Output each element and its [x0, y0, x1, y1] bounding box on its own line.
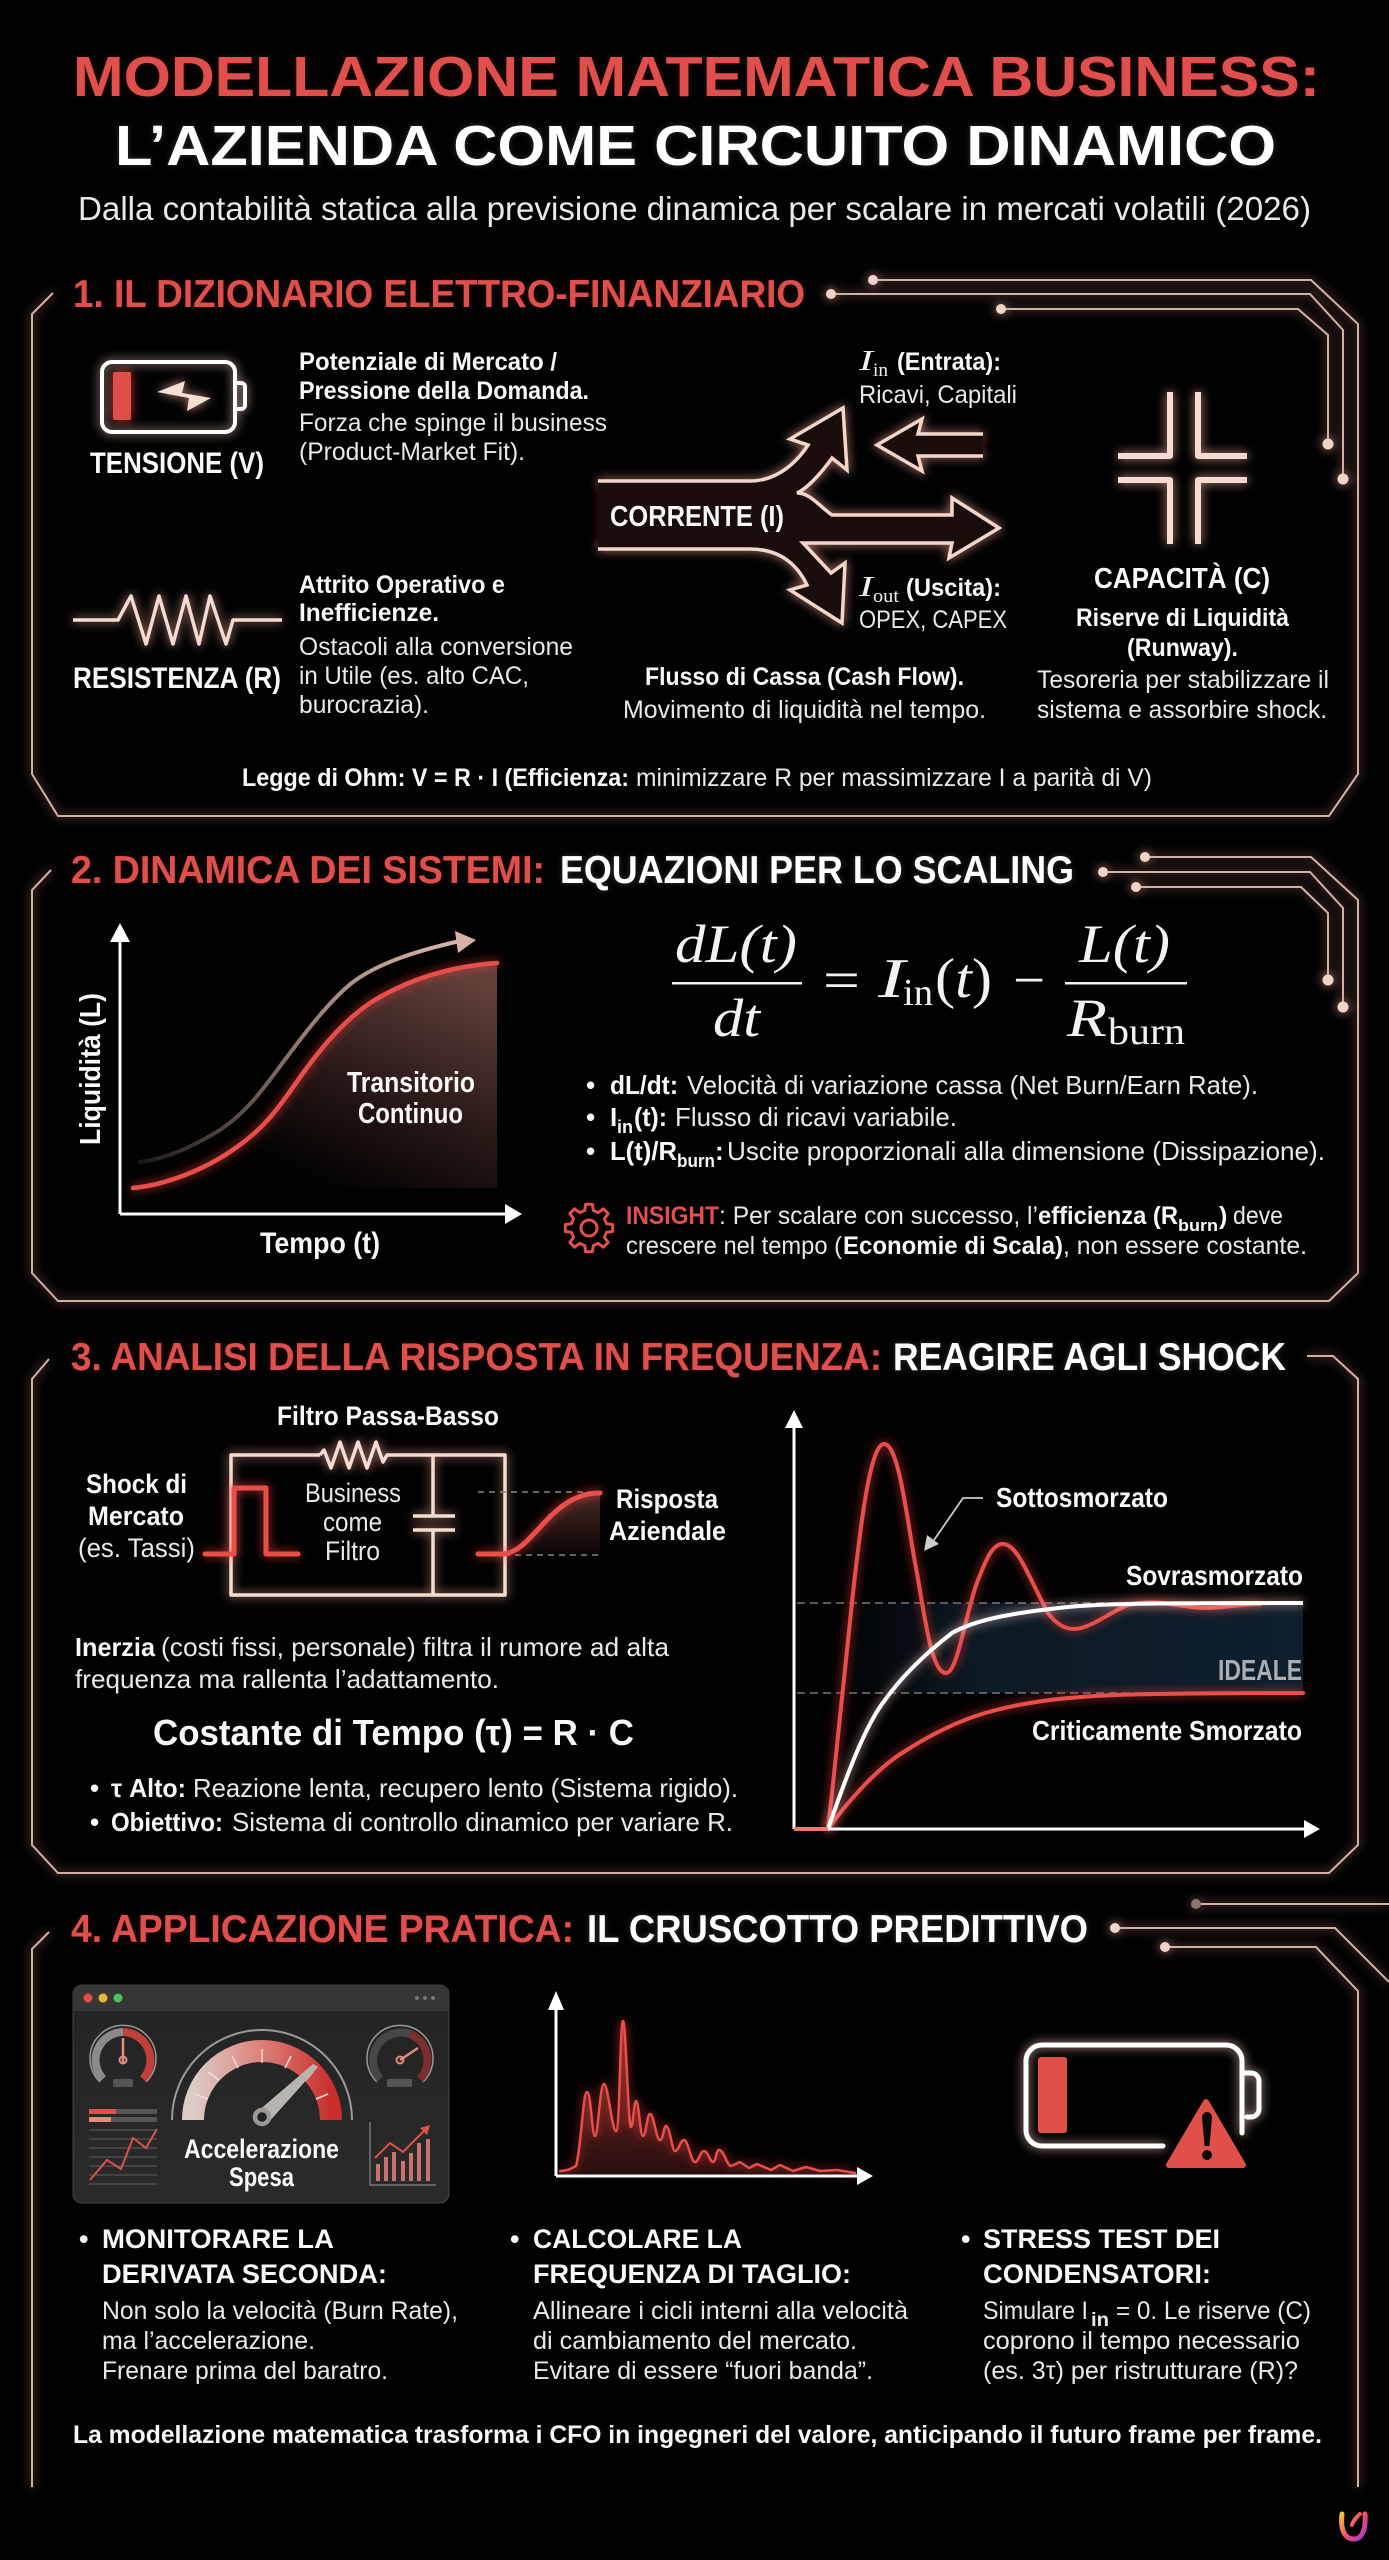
insight callout: deve — [1233, 1202, 1283, 1230]
column: stress test: coprono il tempo necessario — [983, 2327, 1300, 2355]
area under curve — [133, 963, 497, 1188]
label business come filtro: Filtro — [325, 1536, 380, 1566]
insight callout: efficienza (R — [1038, 1202, 1178, 1230]
subtitle: Dalla contabilità statica alla previsione dinamica per scalare in mercati volatili (2026) — [78, 190, 1311, 227]
icon: corner logo — [1342, 2514, 1365, 2539]
text: inerzia: Inerzia — [75, 1632, 156, 1662]
icon: battery low — [102, 362, 245, 432]
dashed guides — [797, 1603, 1303, 1693]
underdamped curve — [828, 1444, 1260, 1829]
column: stress test: Simulare I — [983, 2297, 1088, 2325]
bullets tau: τ Alto: — [111, 1773, 186, 1803]
column: stress test: STRESS TEST DEI — [983, 2224, 1220, 2254]
shock pulse — [205, 1488, 298, 1554]
text: flusso di cassa: Flusso di Cassa (Cash Flow). — [645, 663, 964, 691]
panel frame with circuit traces — [32, 852, 1358, 1301]
chart: frequency spectrum — [548, 1991, 873, 2185]
bullet list: L(t)/R — [610, 1136, 677, 1166]
dashboard mockup — [73, 1985, 449, 2203]
label I in — [857, 346, 1017, 409]
chart: damping response — [785, 1410, 1320, 1838]
axis label y: Liquidità (L) — [75, 993, 107, 1145]
panel: 2 dinamica dei sistemi — [32, 849, 1358, 1301]
bullet list: • — [586, 1136, 595, 1166]
panel: 1 dizionario elettro-finanziario — [32, 273, 1358, 816]
critically damped curve — [828, 1693, 1303, 1829]
text: capacita: sistema e assorbire shock. — [1037, 696, 1327, 724]
arrow: corrente splitting — [598, 408, 999, 623]
bullet list: Uscite proporzionali alla dimensione (Dissipazione). — [727, 1136, 1325, 1166]
text: potenziale di mercato: Forza che spinge il business — [299, 409, 607, 437]
bullets tau: Sistema di controllo dinamico per variare R. — [232, 1807, 733, 1837]
heading 4: 4. APPLICAZIONE PRATICA: — [71, 1908, 574, 1951]
formula costante di tempo: Costante di Tempo (τ) = R · C — [153, 1712, 634, 1753]
heading 4: IL CRUSCOTTO PREDITTIVO — [587, 1908, 1088, 1951]
text: attrito operativo: in Utile (es. alto CAC, — [299, 662, 529, 690]
equation: dt — [713, 988, 762, 1048]
panel: 3 risposta in frequenza — [32, 1336, 1358, 1873]
column: frequenza di taglio: di cambiamento del mercato. — [533, 2327, 857, 2355]
bullet list: Velocità di variazione cassa (Net Burn/Earn Rate). — [687, 1070, 1258, 1100]
heading 3: 3. ANALISI DELLA RISPOSTA IN FREQUENZA: — [71, 1336, 882, 1379]
column: stress test: • — [961, 2224, 970, 2254]
bullet list: dL/dt: — [610, 1070, 678, 1100]
label I in: Ricavi, Capitali — [859, 381, 1017, 409]
column: frequenza di taglio: Evitare di essere “fuori banda”. — [533, 2357, 873, 2385]
label business come filtro: come — [323, 1507, 382, 1537]
column: derivata seconda: Non solo la velocità (Burn Rate), — [102, 2297, 458, 2325]
panel: 4 applicazione pratica — [32, 1899, 1389, 2487]
bullet list: (t): — [634, 1102, 667, 1132]
label criticamente smorzato: Criticamente Smorzato — [1032, 1715, 1302, 1746]
closing statement: La modellazione matematica trasforma i CFO in ingegneri del valore, anticipando il futuro frame per frame. — [73, 2421, 1322, 2449]
insight callout: Economie di Scala) — [843, 1232, 1063, 1260]
column: derivata seconda: Frenare prima del baratro. — [102, 2357, 388, 2385]
insight callout: crescere nel tempo ( — [626, 1232, 843, 1260]
text: flusso di cassa: Movimento di liquidità nel tempo. — [623, 696, 986, 724]
equation: in — [903, 972, 933, 1014]
insight callout — [626, 1202, 1307, 1260]
column: stress test: (es. 3τ) per ristrutturare (R)? — [983, 2357, 1298, 2385]
legge di ohm: minimizzare R per massimizzare I a parità di V) — [636, 764, 1152, 792]
label resistenza: RESISTENZA (R) — [73, 662, 281, 695]
icon: gear — [565, 1204, 613, 1252]
insight callout: ) — [1219, 1202, 1227, 1230]
ghost trend arrow — [140, 931, 476, 1162]
bullet list: burn — [677, 1151, 715, 1171]
label shock — [78, 1469, 195, 1563]
equation: L(t) — [1078, 914, 1170, 974]
gauge label: Accelerazione — [184, 2134, 339, 2164]
label risposta — [609, 1484, 726, 1546]
label I out: I — [857, 572, 876, 603]
text: capacita: CAPACITÀ (C) — [1094, 561, 1270, 595]
label business come filtro: Business — [305, 1478, 401, 1508]
insight callout: burn — [1178, 1216, 1218, 1235]
bullets tau: Obiettivo: — [111, 1807, 223, 1837]
text: capacita — [1037, 561, 1329, 724]
circuit diagram — [205, 1442, 601, 1595]
bullet list: Flusso di ricavi variabile. — [675, 1102, 957, 1132]
ideal band — [835, 1603, 1303, 1693]
icon: empty battery with warning — [1026, 2045, 1259, 2165]
main gauge — [172, 2030, 352, 2124]
mini bars and sparkline — [89, 2109, 157, 2184]
chart label: Transitorio — [347, 1067, 475, 1099]
text: attrito operativo: Attrito Operativo e — [299, 571, 505, 599]
text: capacita: Tesoreria per stabilizzare il — [1037, 666, 1329, 694]
label business come filtro — [305, 1478, 401, 1566]
heading 2: 2. DINAMICA DEI SISTEMI: — [71, 849, 545, 892]
axes — [785, 1410, 1320, 1838]
chart: liquidity over time — [75, 923, 522, 1260]
bullet list: • — [586, 1102, 595, 1132]
bullets tau: • — [90, 1807, 99, 1837]
icon: resistor — [73, 596, 282, 644]
text: attrito operativo: Ostacoli alla conversione — [299, 633, 573, 661]
column: frequenza di taglio: • — [510, 2224, 519, 2254]
equation: (t) — [935, 948, 992, 1010]
equation: R — [1066, 988, 1107, 1048]
equation — [672, 914, 1187, 1053]
text: capacita: Riserve di Liquidità — [1076, 604, 1289, 632]
insight callout: INSIGHT — [626, 1202, 719, 1230]
column: stress test: in — [1091, 2310, 1109, 2331]
text: attrito operativo — [299, 571, 573, 719]
bullet list: in — [617, 1117, 633, 1137]
column: derivata seconda — [79, 2224, 458, 2385]
label I out — [857, 572, 1007, 634]
response curve — [478, 1493, 600, 1554]
label I in: in — [873, 360, 889, 381]
column: stress test: CONDENSATORI: — [983, 2259, 1211, 2289]
text: capacita: (Runway). — [1127, 634, 1238, 662]
response area — [504, 1493, 600, 1554]
label I in: I — [857, 346, 876, 377]
legge di ohm — [242, 764, 1152, 792]
label risposta: Risposta — [616, 1484, 719, 1514]
label risposta: Aziendale — [609, 1516, 726, 1546]
mini column chart — [370, 2122, 436, 2185]
label ideale: IDEALE — [1218, 1655, 1302, 1687]
text: flusso di cassa — [623, 663, 986, 724]
chart label — [347, 1067, 475, 1130]
column: derivata seconda: ma l’accelerazione. — [102, 2327, 315, 2355]
panel frame — [32, 1356, 1358, 1873]
axes — [110, 923, 522, 1224]
heading 3: REAGIRE AGLI SHOCK — [893, 1336, 1286, 1379]
heading 2: EQUAZIONI PER LO SCALING — [560, 849, 1074, 892]
column: frequenza di taglio: FREQUENZA DI TAGLIO: — [533, 2259, 851, 2289]
column: derivata seconda: MONITORARE LA — [102, 2224, 334, 2254]
label sovrasmorzato: Sovrasmorzato — [1126, 1560, 1303, 1591]
label sottosmorzato with leader: Sottosmorzato — [996, 1482, 1168, 1513]
dashed levels — [478, 1492, 601, 1555]
bullet list: • — [586, 1070, 595, 1100]
bullet list — [586, 1070, 1325, 1171]
text: potenziale di mercato: Potenziale di Mercato / — [299, 348, 557, 376]
text: attrito operativo: Inefficienze. — [299, 599, 439, 627]
panel frame with circuit traces — [32, 1899, 1389, 2487]
equation: = — [823, 950, 860, 1010]
column: frequenza di taglio: Allineare i cicli interni alla velocità — [533, 2297, 908, 2325]
liquidity curve — [133, 963, 497, 1188]
chart label: Continuo — [358, 1098, 463, 1130]
column: frequenza di taglio — [510, 2224, 908, 2385]
column: derivata seconda: • — [79, 2224, 88, 2254]
label sottosmorzato with leader — [924, 1482, 1168, 1551]
equation: burn — [1108, 1011, 1185, 1053]
heading 2 — [71, 849, 1074, 892]
right small gauge — [367, 2025, 433, 2087]
text: attrito operativo: burocrazia). — [299, 691, 429, 719]
text: potenziale di mercato — [299, 348, 607, 466]
column: stress test — [961, 2224, 1311, 2385]
legge di ohm: Legge di Ohm: V = R · I (Efficienza: — [242, 764, 629, 792]
bullets tau: • — [90, 1773, 99, 1803]
label I out: OPEX, CAPEX — [859, 606, 1007, 634]
column: stress test: = 0. Le riserve (C) — [1116, 2297, 1311, 2325]
panel frame with circuit traces — [32, 275, 1358, 816]
label filtro: Filtro Passa-Basso — [277, 1401, 499, 1431]
label I out: (Uscita): — [906, 574, 1001, 602]
column: frequenza di taglio: CALCOLARE LA — [533, 2224, 742, 2254]
equation: dL(t) — [675, 914, 797, 974]
text: potenziale di mercato: Pressione della Domanda. — [299, 377, 589, 405]
equation: I — [877, 948, 908, 1010]
circuit wires, resistor and capacitor — [231, 1442, 505, 1595]
heading 4 — [71, 1908, 1088, 1951]
title line 1: MODELLAZIONE MATEMATICA BUSINESS: — [73, 45, 1320, 109]
column: derivata seconda: DERIVATA SECONDA: — [102, 2259, 387, 2289]
text: inerzia — [75, 1632, 670, 1694]
label shock: Mercato — [88, 1501, 184, 1531]
icon: capacitor — [1118, 392, 1247, 544]
text: inerzia: (costi fissi, personale) filtra il rumore ad alta — [161, 1632, 670, 1662]
label tensione: TENSIONE (V) — [90, 447, 264, 480]
dashboard mockup: Spesa — [229, 2162, 295, 2192]
label I in: (Entrata): — [897, 348, 1001, 376]
equation: − — [1013, 950, 1045, 1010]
title block — [73, 45, 1320, 227]
bullets tau — [90, 1773, 738, 1837]
title line 2: L’AZIENDA COME CIRCUITO DINAMICO — [115, 114, 1276, 178]
axis label x: Tempo (t) — [260, 1227, 380, 1260]
label shock: (es. Tassi) — [78, 1533, 195, 1563]
text: potenziale di mercato: (Product-Market Fit). — [299, 438, 525, 466]
insight callout: , non essere costante. — [1063, 1232, 1307, 1260]
bullet list: I — [610, 1102, 617, 1132]
left small gauge — [90, 2025, 156, 2087]
label shock: Shock di — [86, 1469, 187, 1499]
bullets tau: Reazione lenta, recupero lento (Sistema rigido). — [193, 1773, 738, 1803]
label I out: out — [873, 586, 900, 607]
bullet list: : — [715, 1136, 724, 1166]
insight callout: : Per scalare con successo, l’ — [719, 1202, 1038, 1230]
overdamped curve — [828, 1603, 1303, 1829]
heading 1: 1. IL DIZIONARIO ELETTRO-FINANZIARIO — [73, 273, 805, 316]
text: inerzia: frequenza ma rallenta l’adattamento. — [75, 1664, 499, 1694]
label corrente: CORRENTE (I) — [610, 501, 784, 533]
